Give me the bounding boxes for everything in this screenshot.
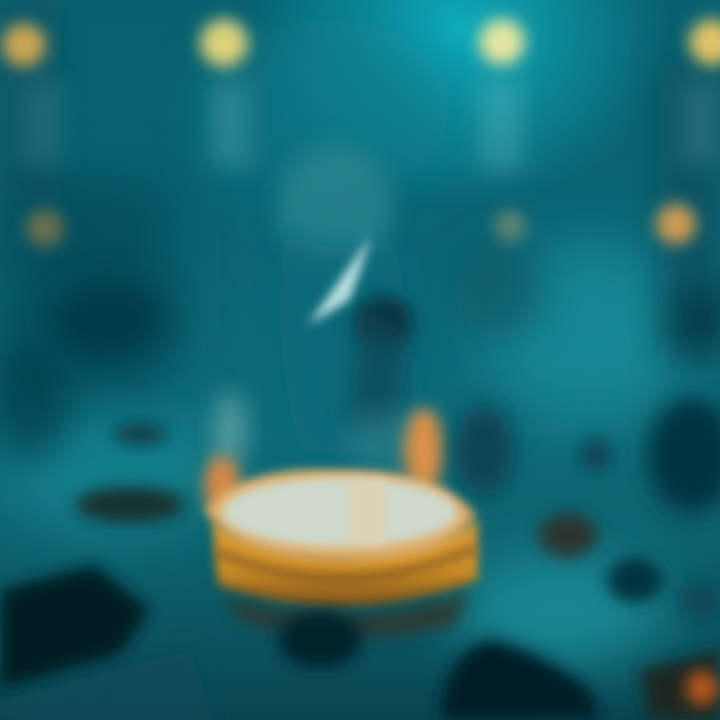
dark foreground shapes xyxy=(0,397,720,720)
light columns xyxy=(22,80,720,170)
rear flames xyxy=(404,408,444,492)
central figure xyxy=(214,142,425,470)
glowing bowl xyxy=(204,408,478,636)
bowl rim xyxy=(205,470,476,561)
bowl surface xyxy=(222,477,458,547)
orange ember xyxy=(686,671,718,705)
ceiling lights xyxy=(2,19,720,247)
bowl body xyxy=(212,520,478,606)
